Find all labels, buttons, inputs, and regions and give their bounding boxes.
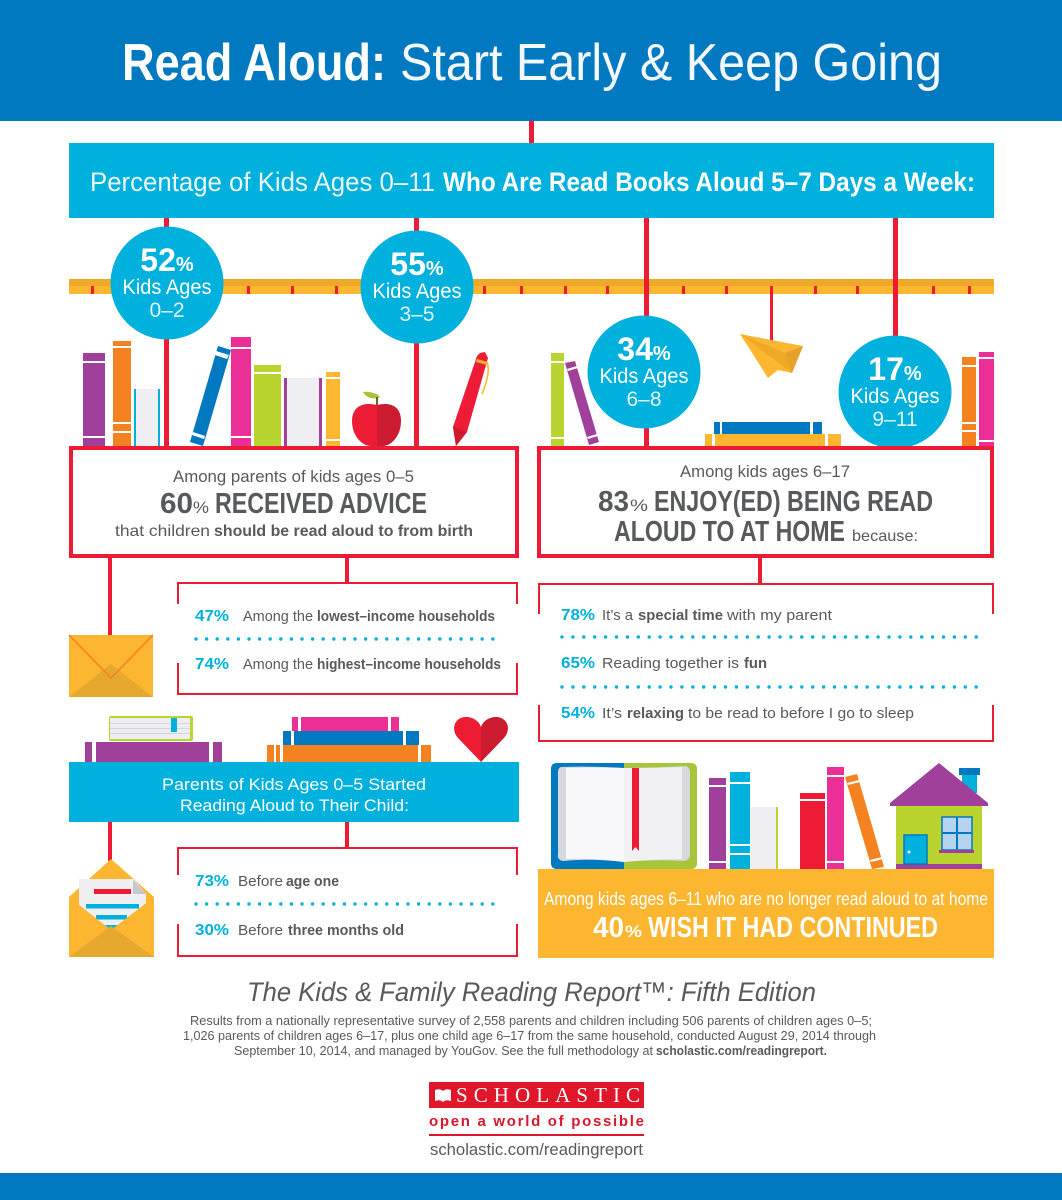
panel: reasons bracket bbox=[539, 557, 993, 741]
panel: enjoyed being read aloud box: ALOUD TO AT HOME bbox=[614, 516, 845, 548]
circle: 52% kids ages 0–2: 0–2 bbox=[149, 299, 185, 322]
books: flat stack of three bbox=[267, 717, 431, 762]
methodology text: scholastic.com/readingreport. bbox=[656, 1044, 827, 1058]
report title: The Kids & Family Reading Report™: Fifth Edition bbox=[247, 977, 816, 1007]
books: right shelf left pair bbox=[551, 353, 599, 446]
methodology text: Results from a nationally representative survey of 2,558 parents and children including 506 parents of children ages 0–5; bbox=[190, 1014, 872, 1028]
icon: paper plane bbox=[740, 334, 803, 378]
ruler shelf with tick marks bbox=[69, 279, 994, 294]
circle: 52% kids ages 0–2: Kids Ages bbox=[122, 276, 212, 299]
circle: 34% kids ages 6–8: Kids Ages bbox=[600, 365, 688, 388]
panel: started reading bracket bbox=[178, 822, 517, 956]
Scholastic logo: scholastic.com/readingreport bbox=[430, 1140, 643, 1159]
icon: closed envelope bbox=[69, 635, 153, 697]
panel: income households bracket: Among the bbox=[243, 608, 313, 625]
header band with title bbox=[0, 0, 1062, 121]
panel: reasons bracket: special time bbox=[638, 607, 723, 624]
icon: house bbox=[890, 763, 988, 869]
panel: wish it had continued: 40 bbox=[593, 912, 624, 944]
methodology text bbox=[183, 1014, 876, 1058]
icon: red pen bbox=[453, 352, 488, 446]
panel: started reading bracket: age one bbox=[286, 873, 339, 890]
panel: reasons bracket: fun bbox=[744, 655, 767, 672]
methodology text: 1,026 parents of children ages 6–17, plus one child age 6–17 from the same household, conducted August 29, 2014 through bbox=[183, 1029, 876, 1043]
panel: received advice box: 60 bbox=[160, 488, 193, 520]
circle: 55% kids ages 3–5: Kids Ages bbox=[372, 280, 462, 303]
panel: received advice box bbox=[71, 448, 517, 556]
panel: reasons bracket: It’s bbox=[602, 705, 622, 722]
circle: 55% kids ages 3–5: 55% bbox=[390, 246, 444, 282]
panel: started reading bracket: Before bbox=[238, 873, 283, 890]
books: lower right shelf bbox=[709, 767, 884, 869]
panel: reasons bracket: It’s a bbox=[602, 607, 634, 624]
panel: income households bracket bbox=[178, 557, 517, 694]
icon: heart bbox=[454, 717, 508, 762]
circle: 34% kids ages 6–8: 6–8 bbox=[626, 388, 662, 411]
panel: reasons bracket: 65% bbox=[561, 655, 595, 672]
circle: 17% kids ages 9–11 bbox=[838, 336, 952, 448]
icon: open envelope with letter bbox=[69, 859, 154, 957]
footer band bbox=[0, 1173, 1062, 1200]
banner: parents started reading bbox=[69, 762, 519, 822]
panel: reasons bracket: relaxing bbox=[627, 705, 684, 722]
panel: income households bracket: Among the bbox=[243, 656, 313, 673]
connector lines from banner to circles and boxes bbox=[164, 218, 898, 446]
panel: received advice box: Among parents of kids ages 0–5 bbox=[173, 467, 414, 486]
icon: open book with bookmark bbox=[551, 763, 697, 869]
panel: received advice box: RECEIVED ADVICE bbox=[215, 488, 427, 520]
panel: received advice box: % bbox=[193, 498, 209, 517]
panel: enjoyed being read aloud box: 83 bbox=[598, 486, 629, 518]
icon: apple bbox=[352, 392, 401, 446]
connector: banner to open envelope bbox=[108, 822, 112, 861]
circle: 52% kids ages 0–2 bbox=[110, 226, 224, 340]
panel: wish it had continued: WISH IT HAD CONTINUED bbox=[648, 912, 938, 944]
panel: income households bracket: lowest–income households bbox=[317, 608, 495, 625]
panel: reasons bracket: 54% bbox=[561, 705, 595, 722]
panel: started reading bracket: 73% bbox=[195, 873, 229, 890]
circle: 34% kids ages 6–8 bbox=[588, 316, 700, 428]
books: left shelf group one bbox=[83, 341, 160, 446]
connector: box to closed envelope bbox=[108, 557, 112, 635]
books: flat stack bbox=[705, 422, 841, 446]
panel: started reading bracket: Before bbox=[238, 922, 283, 939]
circle: 17% kids ages 9–11: 9–11 bbox=[872, 408, 918, 431]
panel: wish it had continued bbox=[538, 869, 994, 958]
books: far right pair bbox=[962, 352, 994, 446]
circle: 55% kids ages 3–5: 3–5 bbox=[399, 303, 435, 326]
connector: header to banner bbox=[529, 121, 534, 143]
banner: percentage of kids: Who Are Read Books Aloud 5–7 Days a Week: bbox=[443, 167, 975, 197]
panel: income households bracket: 47% bbox=[195, 608, 229, 625]
panel: reasons bracket: Reading together is bbox=[602, 655, 739, 672]
circle: 34% kids ages 6–8: 34% bbox=[617, 331, 671, 367]
panel: reasons bracket: 78% bbox=[561, 607, 595, 624]
methodology text: September 10, 2014, and managed by YouGov. See the full methodology at bbox=[234, 1044, 654, 1058]
Scholastic logo: SCHOLASTIC bbox=[456, 1083, 640, 1107]
header band with title: Read Aloud: bbox=[122, 34, 386, 92]
banner: percentage of kids: Percentage of Kids Ages 0–11 bbox=[90, 167, 435, 197]
panel: started reading bracket: 30% bbox=[195, 922, 229, 939]
circle: 52% kids ages 0–2: 52% bbox=[140, 242, 194, 278]
Scholastic logo bbox=[429, 1082, 644, 1159]
panel: income households bracket: highest–income households bbox=[317, 656, 501, 673]
panel: received advice box: that children bbox=[115, 523, 210, 540]
books: flat stack with green book bbox=[85, 716, 222, 762]
panel: enjoyed being read aloud box: ENJOY(ED) BEING READ bbox=[654, 486, 933, 518]
panel: received advice box: should be read aloud to from birth bbox=[214, 523, 473, 540]
panel: income households bracket: 74% bbox=[195, 656, 229, 673]
panel: enjoyed being read aloud box: % bbox=[630, 496, 648, 515]
panel: enjoyed being read aloud box: Among kids ages 6–17 bbox=[680, 462, 850, 481]
header band with title: Start Early & Keep Going bbox=[400, 34, 942, 92]
panel: enjoyed being read aloud box: because: bbox=[852, 528, 918, 545]
panel: reasons bracket: to be read to before I go to sleep bbox=[688, 705, 914, 722]
panel: wish it had continued: Among kids ages 6–11 who are no longer read aloud to at home bbox=[544, 889, 988, 909]
circle: 17% kids ages 9–11: 17% bbox=[868, 351, 922, 387]
panel: wish it had continued: % bbox=[625, 922, 642, 941]
banner: parents started reading: Reading Aloud to Their Child: bbox=[180, 796, 409, 815]
panel: enjoyed being read aloud box bbox=[539, 448, 992, 556]
banner: parents started reading: Parents of Kids Ages 0–5 Started bbox=[162, 775, 426, 794]
banner: percentage of kids bbox=[69, 143, 994, 218]
panel: reasons bracket: with my parent bbox=[726, 607, 833, 624]
books: left shelf group two bbox=[190, 337, 340, 446]
circle: 17% kids ages 9–11: Kids Ages bbox=[850, 385, 940, 408]
panel: started reading bracket: three months old bbox=[288, 922, 404, 939]
Scholastic logo: open a world of possible bbox=[429, 1113, 644, 1130]
circle: 55% kids ages 3–5 bbox=[360, 230, 474, 344]
